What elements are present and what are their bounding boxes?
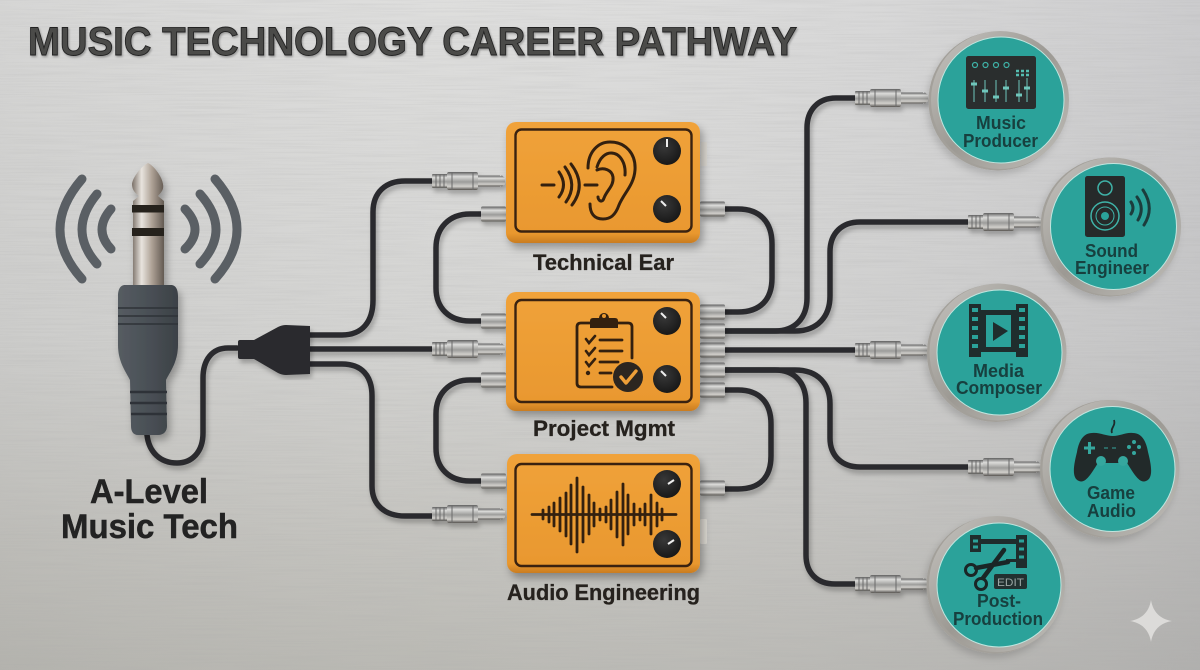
icon: ear [542,142,635,219]
label: A-Level Music Tech [61,473,238,546]
badge text: Music [976,113,1026,133]
icon: clipboard [577,313,643,392]
badge text [956,361,1042,398]
badge text [953,591,1043,629]
input plugs [432,172,505,523]
label: Audio Engineering: Audio Engineering [507,580,700,605]
label: A-Level Music Tech: A-Level [90,473,208,511]
icon: sound waves [60,179,237,279]
icon: jack plug [118,163,178,435]
badge: Post-Production [926,516,1065,654]
badge text [1087,483,1136,521]
label: A-Level Music Tech: Music Tech [61,508,238,546]
label: Technical Ear: Technical Ear [533,250,674,275]
knob: bottom [653,195,681,223]
badge: Music Producer [928,31,1069,170]
badge text: Game [1087,483,1135,503]
icon: film strip [969,304,1028,357]
badge text: Composer [956,378,1042,398]
icon: game controller [1074,420,1151,481]
label: Project Mgmt: Project Mgmt [533,416,676,441]
badge: Game Audio [1040,400,1180,538]
panel: Audio Engineering pedal [507,454,707,573]
icon: speaker [1085,176,1149,237]
badge text: Production [953,609,1043,629]
knob: bottom [653,365,681,393]
knob: bottom [653,530,681,558]
badge text [1075,241,1149,278]
icon: waveform [532,478,676,552]
panel: Project Mgmt pedal [506,292,700,411]
title: MUSIC TECHNOLOGY CAREER PATHWAY [28,20,797,64]
knob: top [653,137,681,165]
badge text: Sound [1085,241,1138,261]
badge text: Producer [963,131,1038,151]
cables [147,98,969,584]
output plugs [855,89,1041,593]
icon: film and scissors: EDIT [997,577,1024,589]
badge text [963,113,1038,151]
badge: Media Composer [927,284,1066,422]
icon: mixing desk [966,56,1036,109]
panel: Technical Ear pedal [506,122,707,243]
badge text: Engineer [1075,258,1149,278]
badge text: Media [973,361,1025,381]
splitter [238,325,310,375]
badge text: Post- [977,591,1021,611]
knob: top [653,470,681,498]
sockets between pedals [481,202,725,496]
knob: top [653,307,681,335]
icon: sparkle watermark [1130,600,1172,642]
badge text: Audio [1087,501,1136,521]
badge: Sound Engineer [1040,158,1181,296]
